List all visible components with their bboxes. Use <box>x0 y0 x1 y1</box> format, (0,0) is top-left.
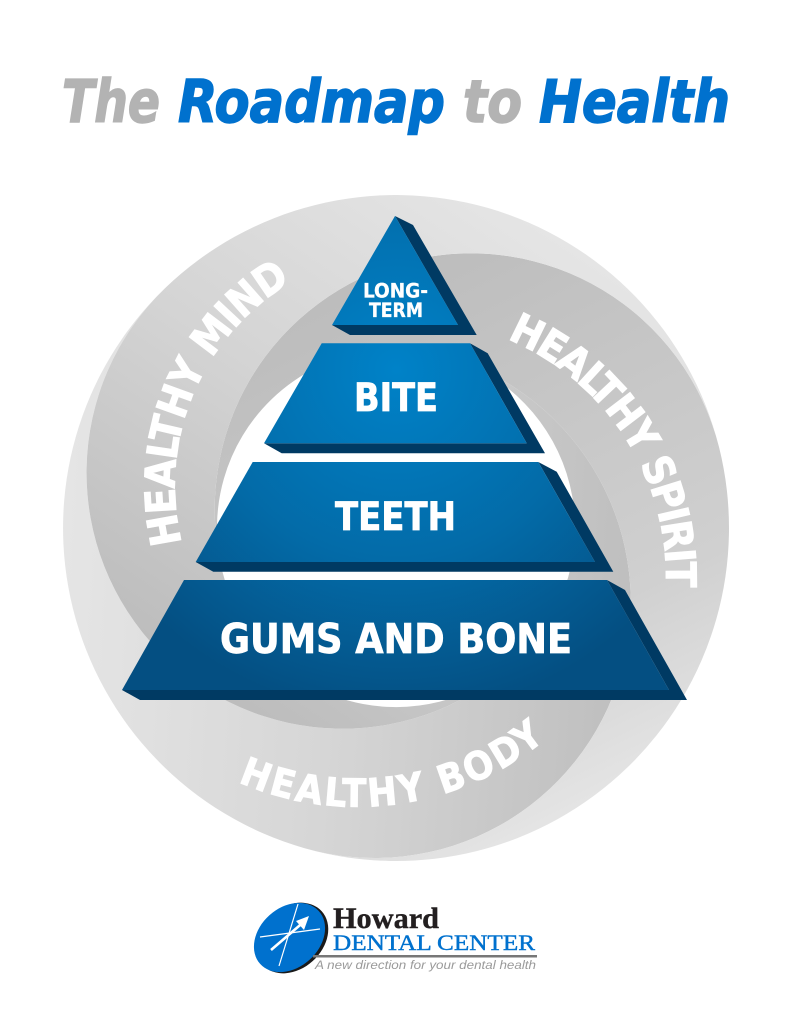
wordmark: dental center: DENTAL CENTER <box>333 930 535 955</box>
label: healthy mind: HEALTHY MIND <box>144 262 284 546</box>
tier: gums and bone: GUMS AND BONE <box>220 615 572 663</box>
pyramid <box>122 216 687 700</box>
tier: long-term: LONG- <box>363 280 428 302</box>
title: Roadmap <box>178 67 445 136</box>
band: healthy mind <box>87 195 719 729</box>
label: healthy body: HEALTHY BODY <box>240 716 538 808</box>
band: healthy body <box>63 288 631 858</box>
tier: long-term <box>332 216 477 335</box>
icon: compass ellipse <box>240 888 342 988</box>
logo: howard dental center <box>240 888 537 988</box>
title: to <box>463 67 522 136</box>
tier: long-term: TERM <box>369 299 423 322</box>
label: healthy spirit: HEALTHY SPIRIT <box>510 312 698 588</box>
tier: bite: BITE <box>354 376 438 421</box>
tier: gums and bone <box>122 580 687 700</box>
title <box>62 67 730 136</box>
rule <box>313 955 537 958</box>
tagline: A new direction for your dental health <box>314 960 536 972</box>
tier: bite <box>264 343 545 453</box>
wordmark: howard: Howard <box>333 902 439 935</box>
band: healthy spirit <box>215 253 729 861</box>
title: The <box>62 67 160 136</box>
tier: teeth: TEETH <box>335 495 456 540</box>
tier: teeth <box>196 462 613 572</box>
title: Health <box>539 67 730 136</box>
swirl ring <box>63 195 729 861</box>
